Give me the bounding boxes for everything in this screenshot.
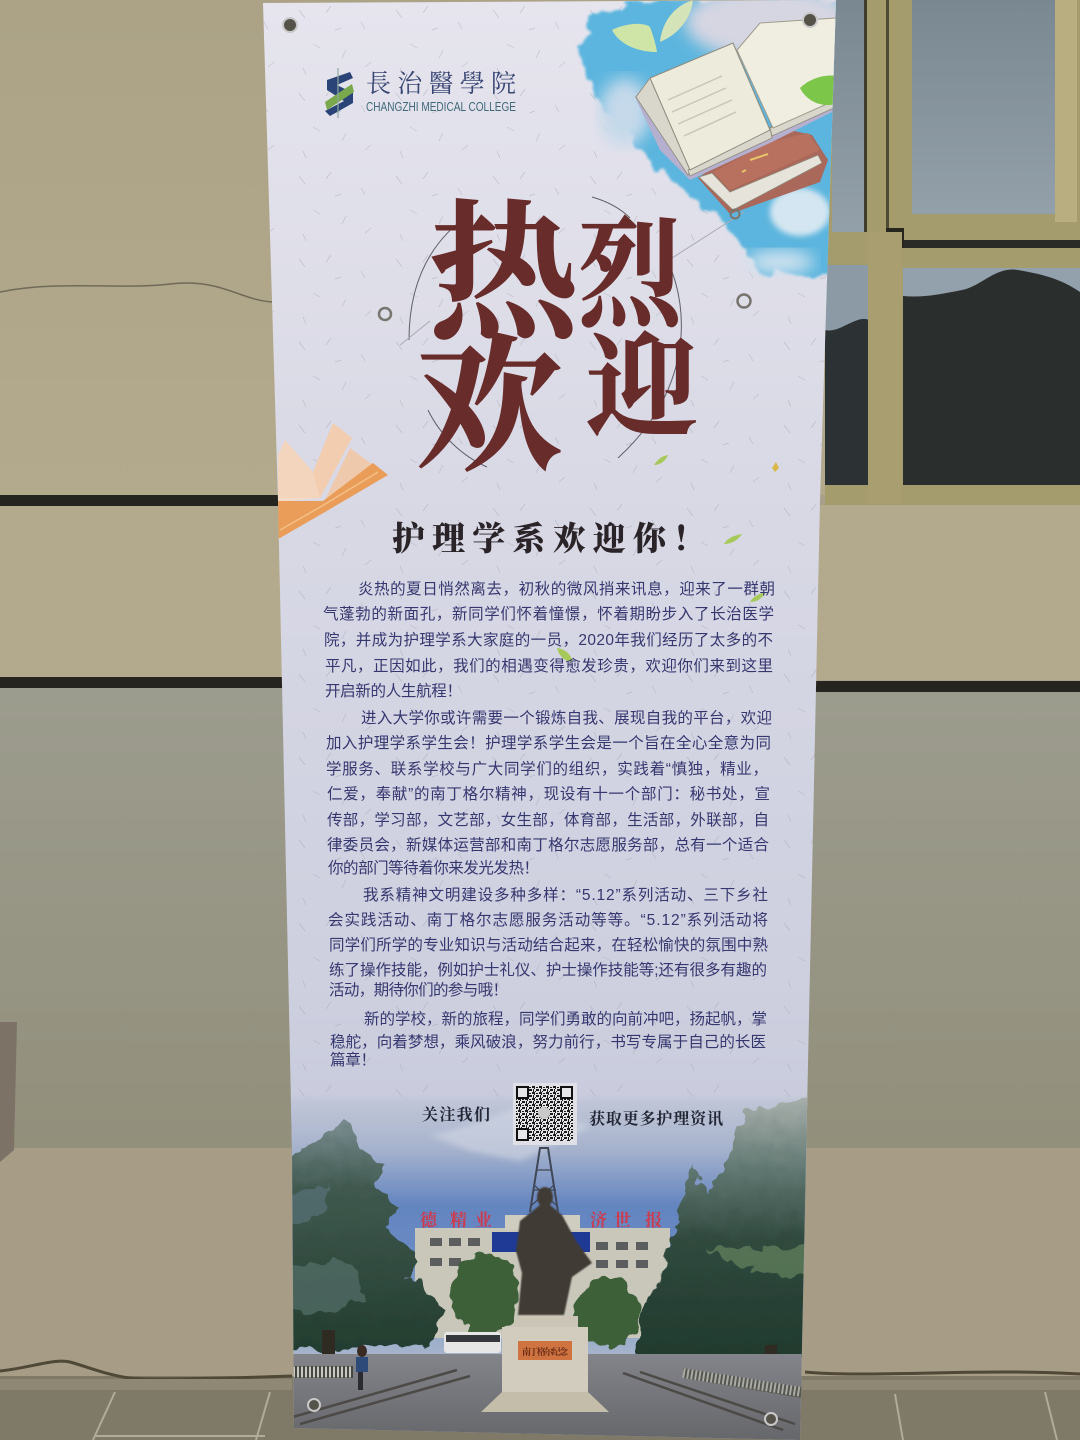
panel: hanging banner <box>255 0 855 1440</box>
call to action: follow us: 关注我们 <box>422 1102 490 1125</box>
text block: paragraph 4: 稳舵，向着梦想，乘风破浪，努力前行，书写专属于自己的长医 <box>330 1033 766 1051</box>
text block: paragraph 4: 新的学校，新的旅程，同学们勇敢的向前冲吧，扬起帆，掌 <box>364 1010 767 1028</box>
bus <box>444 1332 501 1353</box>
title: 热烈欢迎: 迎 <box>586 298 698 459</box>
illustration: books and watercolour splash <box>578 0 855 278</box>
QR code <box>513 1083 577 1145</box>
text block: paragraph 3 <box>328 886 768 999</box>
text block: paragraph 2: 你的部门等待着你来发光发热！ <box>328 859 539 877</box>
title: 热烈欢迎: 欢 <box>415 289 563 501</box>
window with reflected trees <box>825 0 1080 505</box>
statue <box>516 1187 592 1315</box>
text block: paragraph 3: 同学们所学的专业知识与活动结合起来，在轻松愉快的氛围中熟 <box>329 936 768 954</box>
text block: paragraph 4 <box>330 1010 767 1069</box>
text block: paragraph 3: 活动，期待你们的参与哦！ <box>329 981 508 999</box>
text block: paragraph 1 <box>323 580 775 700</box>
logo: Changzhi Medical College: 長治醫學院 <box>366 64 516 100</box>
fences <box>285 1366 802 1398</box>
building: 精 <box>450 1206 467 1231</box>
title: 热烈欢迎: 烈 <box>578 180 687 350</box>
text block: paragraph 2: 律委员会，新媒体运营部和南丁格尔志愿服务部，总有一个适合 <box>327 836 769 854</box>
text block: paragraph 2: 加入护理学系学生会！护理学系学生会是一个旨在全心全意为同 <box>326 733 771 752</box>
trunk left <box>322 1330 335 1354</box>
illustration: open orange book <box>278 423 388 538</box>
building <box>415 1206 670 1338</box>
logo: Changzhi Medical College <box>325 64 516 118</box>
logo icon <box>325 68 354 118</box>
trunk right <box>765 1345 777 1354</box>
open white book <box>635 18 836 180</box>
person <box>356 1345 368 1390</box>
text block: paragraph 1: 平凡，正因如此，我们的相遇变得愈发珍贵，欢迎你们来到这里 <box>325 657 773 675</box>
lower red book <box>698 126 828 214</box>
grommets <box>283 13 817 1425</box>
leaf accents <box>557 455 779 662</box>
text block: paragraph 1: 院，并成为护理学系大家庭的一员，2020年我们经历了太多的不 <box>324 630 773 649</box>
building: 济 <box>590 1206 607 1231</box>
heading: 护理学系欢迎你: 护理学系欢迎你！ <box>392 513 706 560</box>
title: 热烈欢迎 <box>418 198 696 472</box>
text block: paragraph 2: 进入大学你或许需要一个锻炼自我、展现自我的平台，欢迎 <box>361 709 772 727</box>
title: 热烈欢迎: 热 <box>428 153 588 369</box>
text block: paragraph 1: 气蓬勃的新面孔，新同学们怀着憧憬，怀着期盼步入了长治医学 <box>323 605 774 623</box>
text block: paragraph 1: 开启新的人生航程！ <box>325 682 462 700</box>
text block: paragraph 2: 仁爱，奉献”的南丁格尔精神，现设有十一个部门：秘书处，宣 <box>327 785 770 803</box>
decorative circle lines and rings around title <box>379 197 750 467</box>
text block: paragraph 3: 练了操作技能，例如护士礼仪、护士操作技能等;还有很多有趣的 <box>329 961 767 979</box>
text block: paragraph 4: 篇章！ <box>330 1051 376 1069</box>
pine tree right <box>636 1095 815 1358</box>
logo: Changzhi Medical College: CHANGZHI MEDICAL COLLEGE <box>366 100 516 114</box>
building: 业 <box>475 1206 492 1231</box>
text block: paragraph 2: 学服务、联系学校与广大同学们的组织，实践着“慎独，精业， <box>326 760 768 778</box>
building: 德 <box>420 1206 439 1231</box>
pine tree left <box>285 1118 445 1350</box>
building: 世 <box>614 1206 631 1231</box>
photo: campus square with statue <box>285 1095 815 1440</box>
round trees <box>451 1254 639 1346</box>
text block: paragraph 1: 炎热的夏日悄然离去，初秋的微风捎来讯息，迎来了一群朝 <box>358 580 775 598</box>
text block: paragraph 2 <box>326 709 772 877</box>
plaza ground <box>285 1354 815 1440</box>
text block: paragraph 3: 会实践活动、南丁格尔志愿服务活动等等。“5.12”系列活动将 <box>328 911 768 929</box>
text block: paragraph 2: 传部，学习部，文艺部，女生部，体育部，生活部，外联部，自 <box>327 810 769 829</box>
building: 报 <box>645 1206 662 1231</box>
pedestal <box>481 1316 609 1412</box>
text block: paragraph 3: 我系精神文明建设多种多样：“5.12”系列活动、三下乡社 <box>363 886 768 904</box>
pedestal: 南丁格尔纪念 <box>522 1345 569 1358</box>
call to action: get nursing info: 获取更多护理资讯 <box>589 1106 723 1129</box>
